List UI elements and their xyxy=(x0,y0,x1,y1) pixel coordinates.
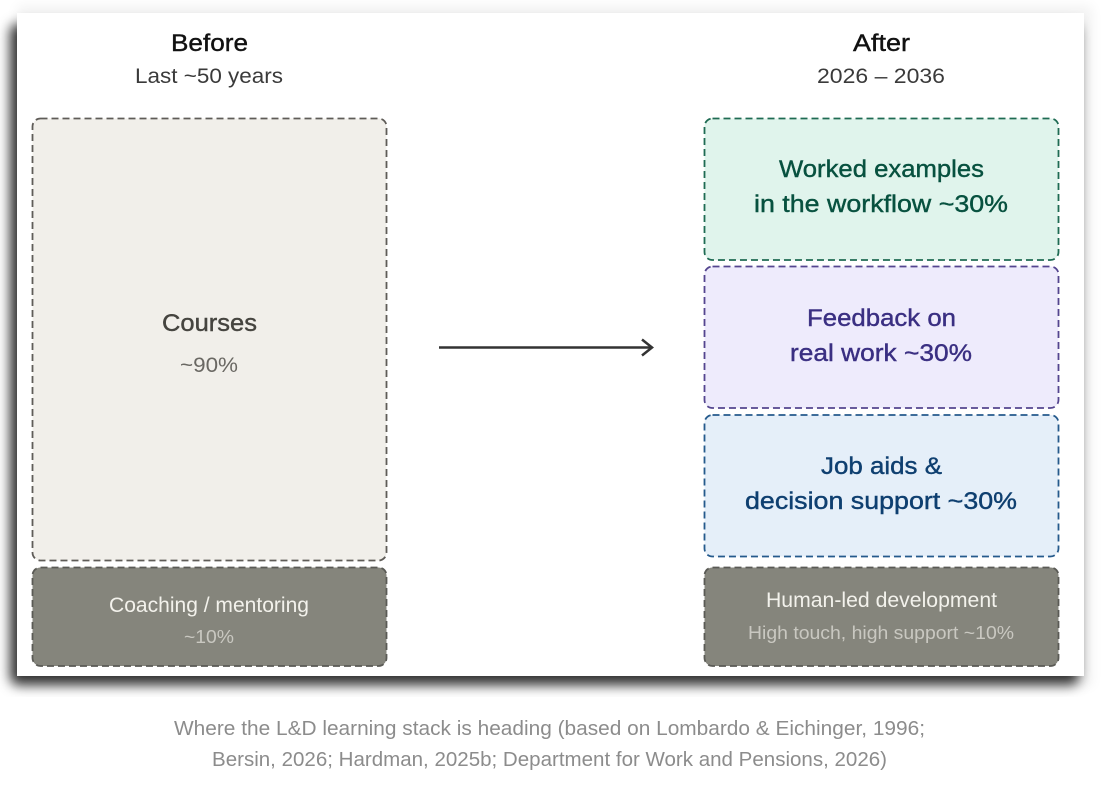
block: feedback xyxy=(704,266,1058,408)
block: worked examples: in the workflow ~30% xyxy=(754,191,1008,218)
block: job aids: decision support ~30% xyxy=(745,488,1017,515)
heading: before: Before xyxy=(171,30,248,57)
block: courses: ~90% xyxy=(180,354,238,377)
panel: before column xyxy=(32,30,386,666)
block: coaching and mentoring: Coaching / mentoring xyxy=(109,594,309,617)
block: human-led development xyxy=(704,568,1058,666)
block: worked examples xyxy=(704,118,1058,260)
block: feedback: real work ~30% xyxy=(790,340,972,367)
caption: Bersin, 2026; Hardman, 2025b; Department for Work and Pensions, 2026) xyxy=(212,748,887,771)
block: courses: Courses xyxy=(162,310,257,337)
block: human-led development: High touch, high support ~10% xyxy=(748,623,1014,643)
caption xyxy=(174,717,925,771)
block: coaching and mentoring: ~10% xyxy=(184,627,234,647)
block: job aids xyxy=(704,415,1058,556)
caption: Where the L&D learning stack is heading (based on Lombardo & Eichinger, 1996; xyxy=(174,717,925,740)
heading: after: After xyxy=(853,30,910,57)
heading: before: Last ~50 years xyxy=(135,65,283,88)
heading: after xyxy=(817,30,945,88)
block: courses xyxy=(32,118,386,560)
panel: after column xyxy=(704,30,1058,666)
arrow xyxy=(439,340,652,356)
heading: after: 2026 – 2036 xyxy=(817,65,945,88)
block: human-led development: Human-led development xyxy=(766,589,997,612)
block: job aids: Job aids & xyxy=(821,453,942,480)
block: coaching and mentoring xyxy=(32,568,386,666)
heading: before xyxy=(135,30,283,88)
block: worked examples: Worked examples xyxy=(779,156,984,183)
block: feedback: Feedback on xyxy=(807,305,956,332)
